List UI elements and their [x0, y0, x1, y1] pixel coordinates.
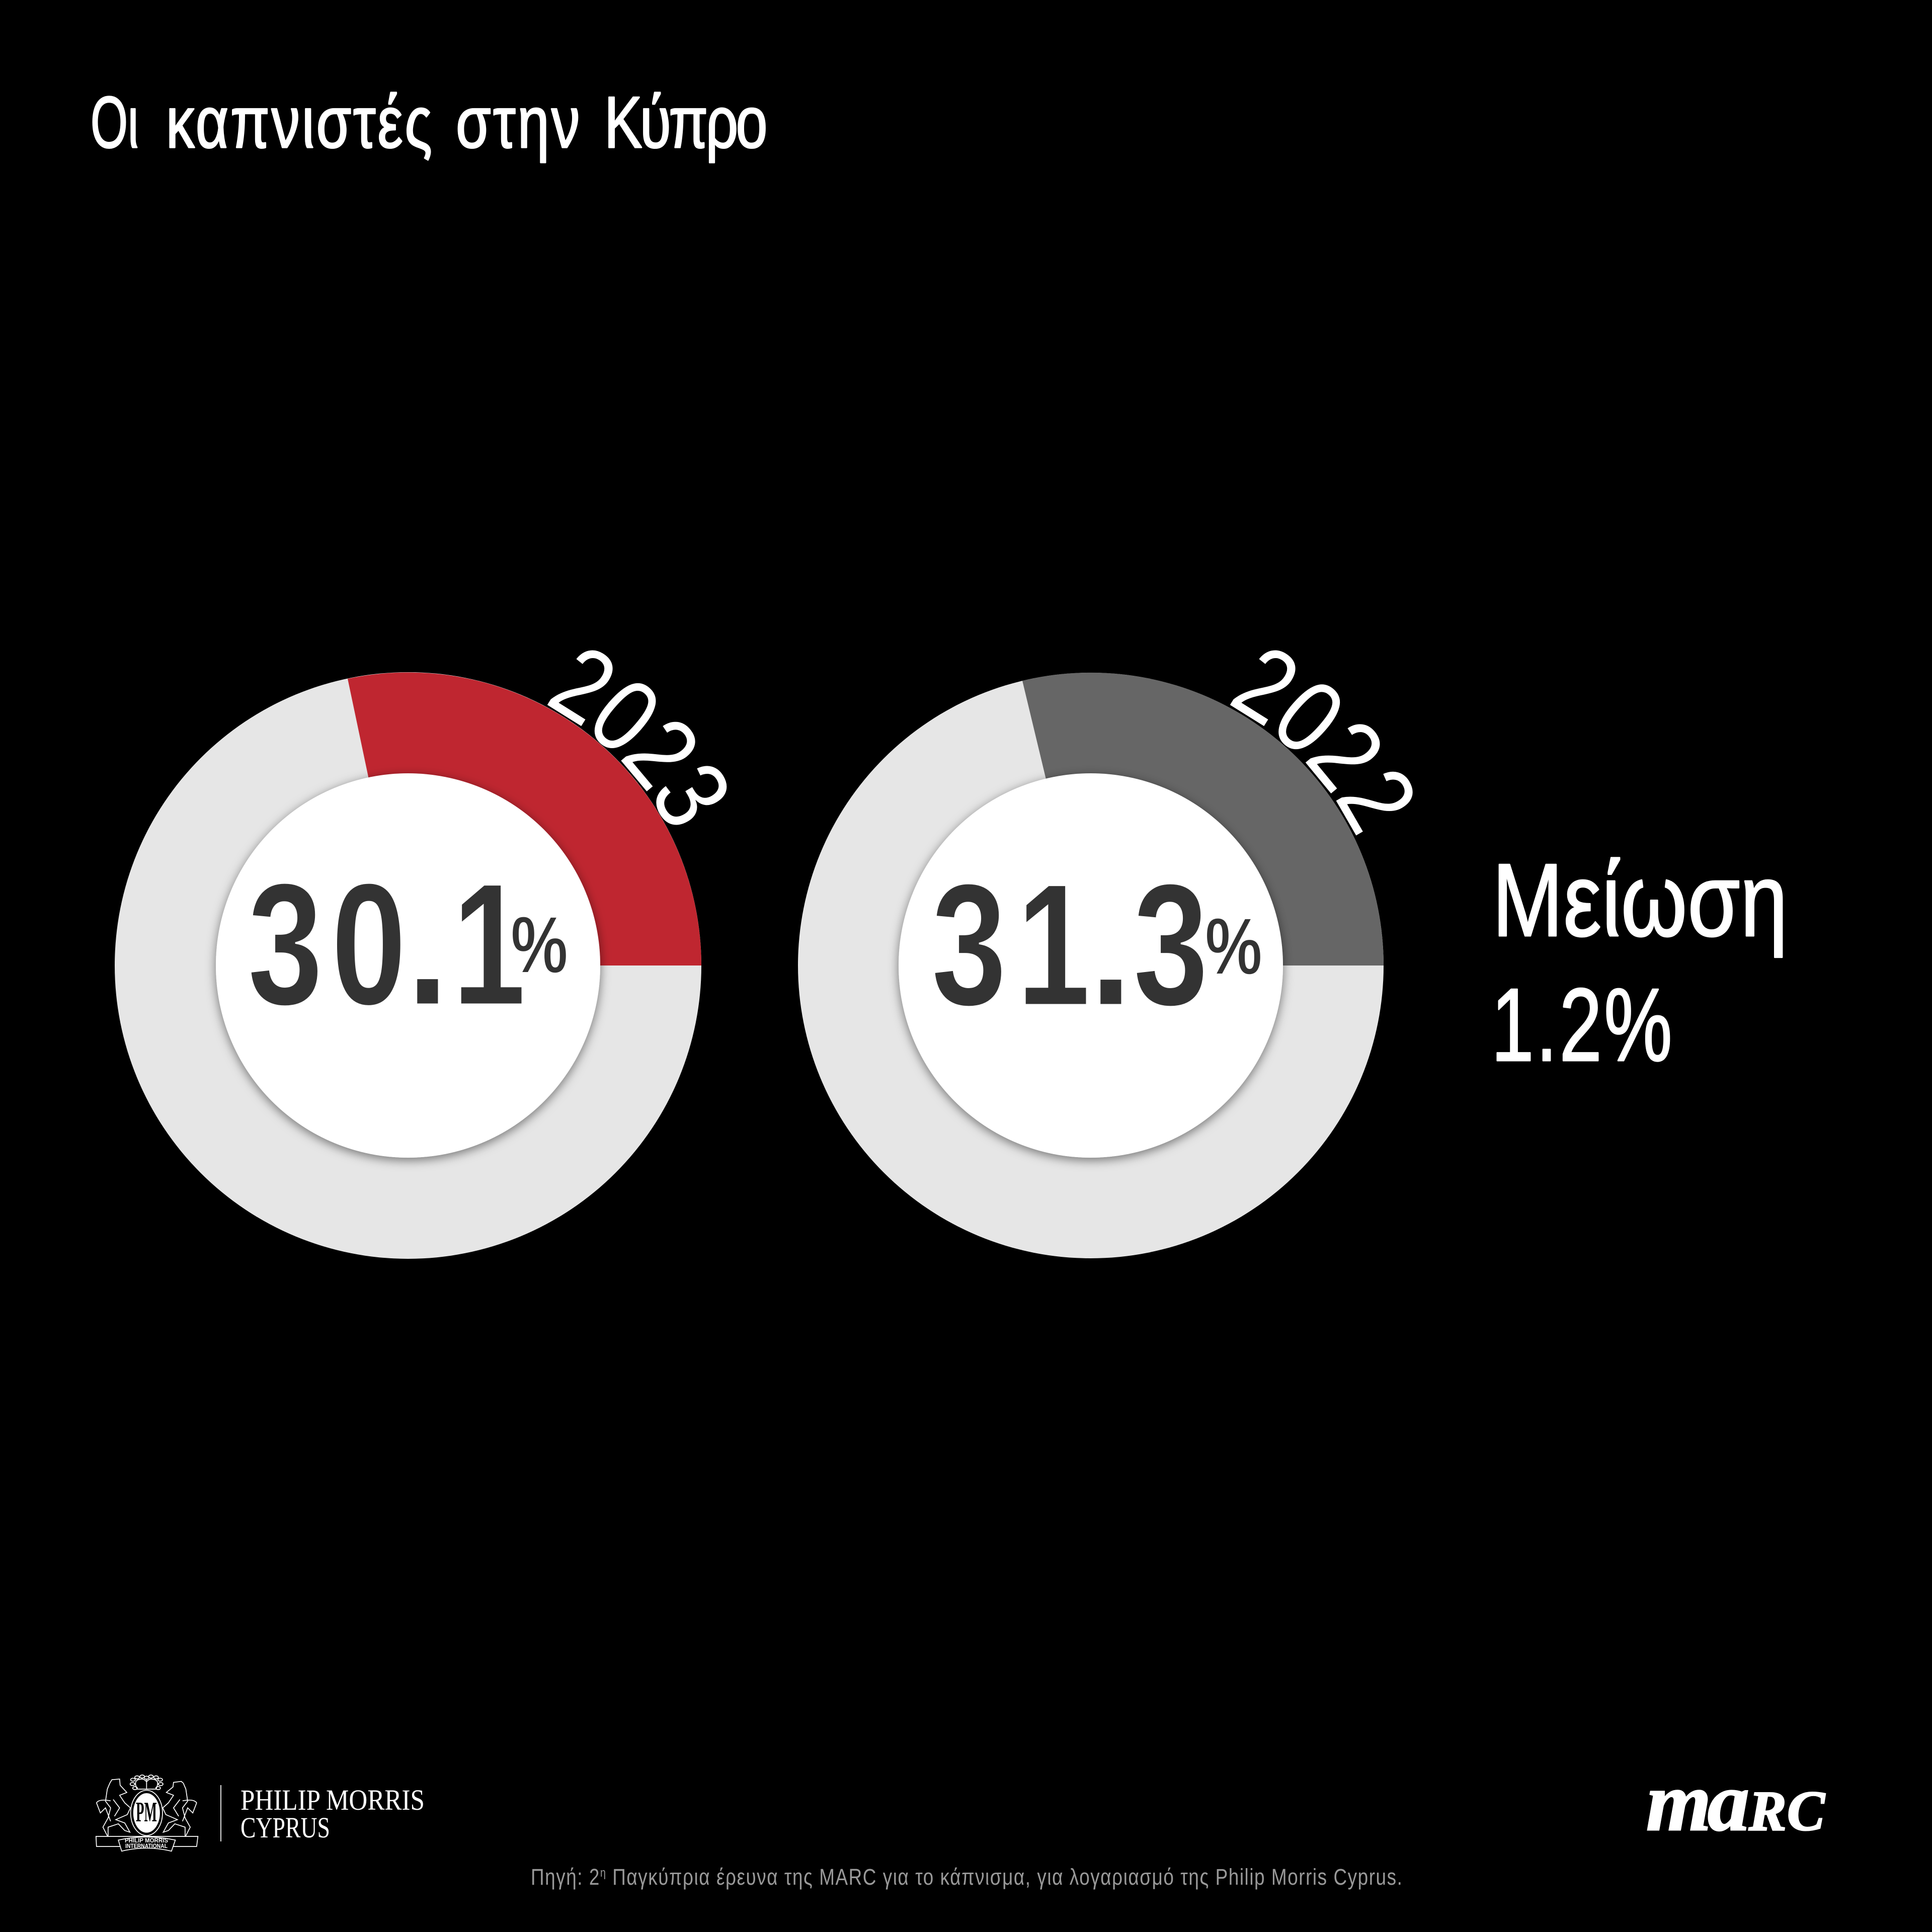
value 31.3%: 3: [931, 848, 1007, 1042]
year label 2023: 3: [629, 744, 755, 846]
title: Οι: [91, 81, 138, 163]
marc logo: m: [1646, 1755, 1711, 1848]
source note: η: [600, 1866, 606, 1879]
title: Κύπρο: [604, 81, 767, 163]
title: καπνιστές: [166, 81, 432, 163]
year label 2022: [1215, 622, 1440, 850]
crest crown: [130, 1775, 163, 1790]
value 31.3%: [931, 848, 1262, 1042]
title: στην: [456, 81, 580, 163]
shield inner: [133, 1793, 160, 1833]
donut track 2022: [798, 673, 1384, 1258]
crest shield: [131, 1790, 163, 1835]
donut centre 2023: [216, 773, 600, 1158]
divider: [220, 1785, 221, 1841]
infographic canvas: PM: [136, 1797, 157, 1828]
ribbon: [96, 1836, 198, 1846]
donut segment 2023: [348, 673, 701, 965]
marc logo: R: [1748, 1780, 1787, 1842]
source note: Πηγή: 2: [531, 1865, 599, 1890]
value 30.1%: 0: [331, 847, 407, 1041]
crest ribbon text: PHILIP MORRIS: [125, 1837, 168, 1844]
left lion: [97, 1779, 130, 1837]
value 30.1%: 3: [248, 847, 323, 1041]
year label 2023: 2: [532, 622, 635, 747]
callout: decrease: [1491, 842, 1788, 1083]
value 31.3%: 3: [1133, 848, 1209, 1042]
callout: decrease: Μείωση: [1492, 842, 1788, 958]
year label 2022: 2: [1315, 750, 1440, 850]
right lion: [163, 1782, 197, 1837]
donut centre 2022: [899, 773, 1283, 1158]
donut track 2023: [115, 672, 701, 1259]
crest ribbon text: INTERNATIONAL: [125, 1842, 168, 1849]
panel: donut 2023: [115, 622, 755, 1259]
Philip Morris Cyprus wordmark: PHILIP MORRIS: [240, 1784, 425, 1816]
title: [91, 81, 767, 163]
value 31.3%: %: [1205, 901, 1262, 991]
marc logo: [1646, 1755, 1825, 1848]
value 30.1%: [248, 847, 568, 1041]
value 30.1%: .: [406, 847, 449, 1041]
panel: donut 2022: [798, 622, 1440, 1258]
value 31.3%: 1: [1017, 848, 1090, 1041]
marc logo: C: [1787, 1780, 1825, 1842]
icon: Philip Morris crest: [96, 1775, 198, 1851]
donut segment 2022: [1022, 673, 1384, 965]
Philip Morris Cyprus wordmark: [240, 1784, 425, 1844]
marc logo: a: [1708, 1755, 1749, 1848]
Philip Morris Cyprus wordmark: CYPRUS: [240, 1811, 330, 1844]
year label 2022: 2: [1215, 622, 1318, 747]
crest ribbon text: [125, 1837, 168, 1849]
value 30.1%: %: [511, 900, 568, 990]
year label 2023: 2: [601, 696, 722, 809]
year label 2023: [532, 622, 755, 846]
source note: Παγκύπρια έρευνα της MARC για το κάπνισμα, για λογαριασμό της Philip Morris Cyprus.: [606, 1865, 1402, 1890]
value 30.1%: 1: [452, 847, 526, 1041]
ribbon label: [118, 1837, 175, 1851]
year label 2023: 0: [569, 656, 682, 776]
value 31.3%: .: [1089, 848, 1133, 1042]
year label 2022: 2: [1285, 699, 1407, 811]
callout: decrease: 1.2%: [1491, 968, 1672, 1083]
year label 2022: 0: [1252, 657, 1366, 777]
